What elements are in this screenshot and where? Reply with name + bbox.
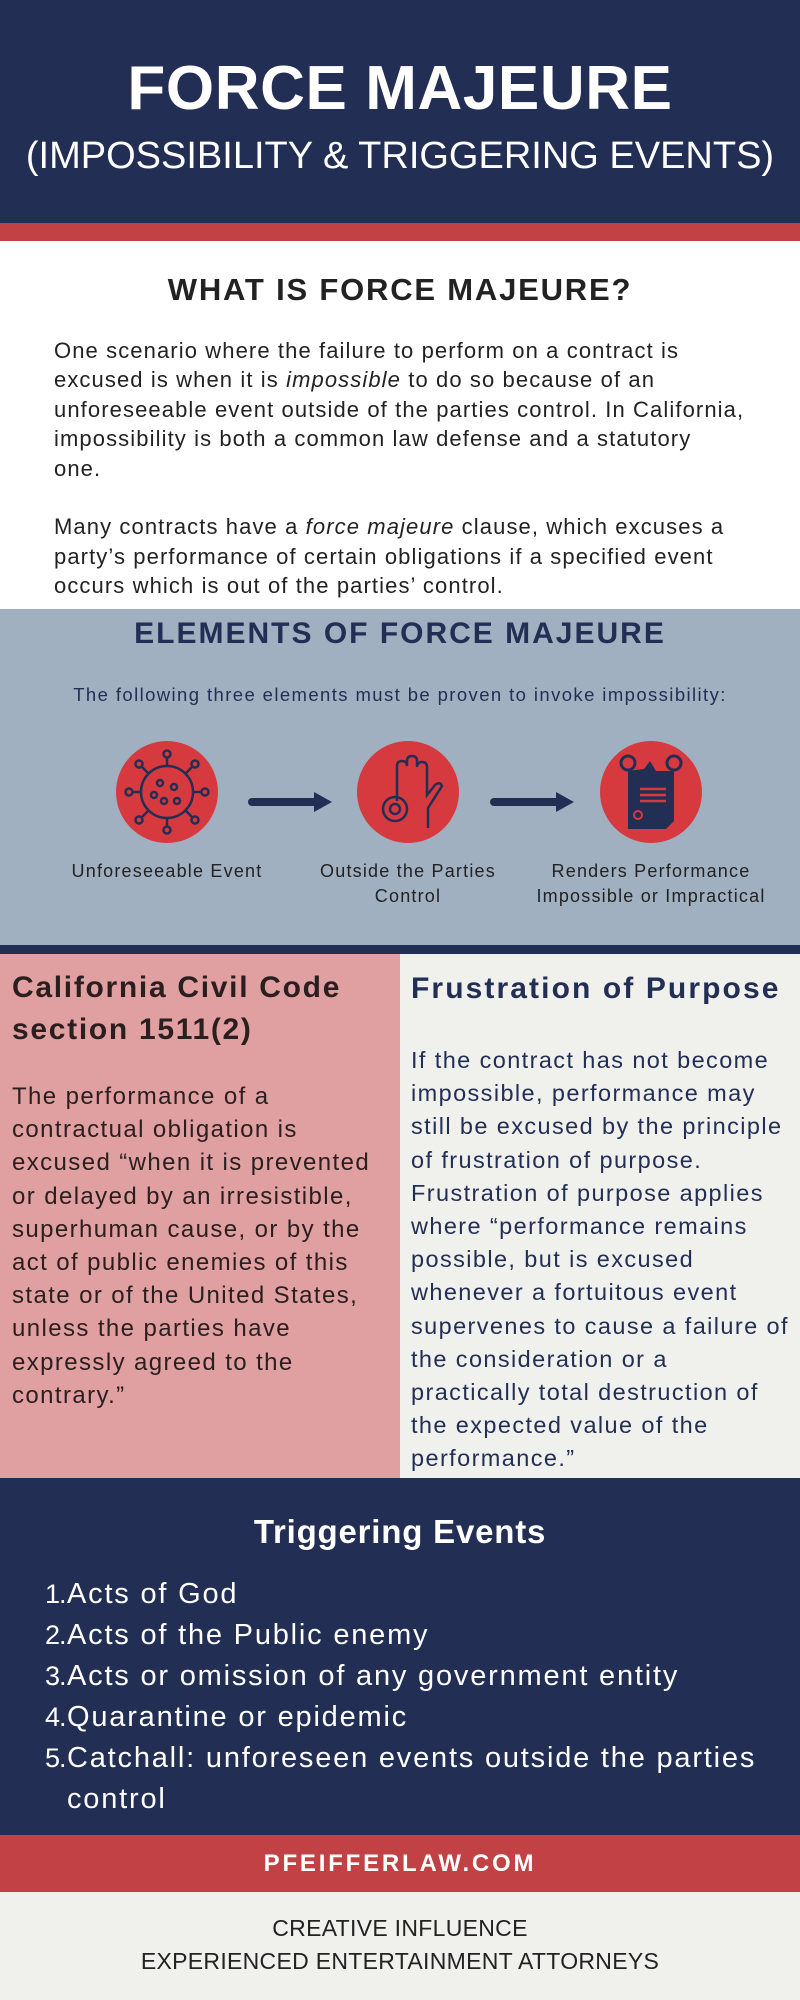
panel: california civil code — [0, 954, 400, 1478]
text: civil code quote: expressly agreed to the — [12, 1349, 294, 1376]
footer: EXPERIENCED ENTERTAINMENT ATTORNEYS — [141, 1948, 659, 1974]
list: triggering events — [45, 1578, 756, 1815]
text block: definition — [54, 338, 744, 598]
label: outside the parties control: Control — [375, 886, 441, 906]
label: unforeseeable event: Unforeseeable Event — [72, 861, 262, 881]
text: civil code quote — [12, 1083, 370, 1409]
heading: frustration: Frustration of Purpose — [411, 972, 781, 1005]
text: civil code quote: contractual obligation is — [12, 1116, 298, 1143]
title: FORCE MAJEURE — [127, 54, 673, 123]
list: triggering events: control — [67, 1783, 167, 1815]
website banner — [0, 1835, 800, 1892]
heading: civil code: section 1511(2) — [12, 1013, 253, 1046]
text block: definition: One scenario where the failure to perform on a contract is — [54, 338, 679, 363]
list: triggering events: Acts of the Public enemy — [67, 1619, 429, 1651]
text: civil code quote: unless the parties have — [12, 1315, 291, 1342]
text: frustration explanation: the expected value of the — [411, 1412, 709, 1438]
text: civil code quote: The performance of a — [12, 1083, 269, 1110]
footer: CREATIVE INFLUENCE — [272, 1915, 528, 1941]
label: renders performance impossible: Renders Performance — [552, 861, 750, 881]
subtitle: (IMPOSSIBILITY & TRIGGERING EVENTS) — [26, 135, 774, 177]
text block: definition: party’s performance of certain obligations if a specified event — [54, 544, 714, 569]
icon: hand and gear — [357, 741, 459, 843]
text: frustration explanation: still be excused by the principle — [411, 1113, 782, 1139]
section heading: what is force majeure: WHAT IS FORCE MAJEURE? — [168, 272, 632, 307]
text: civil code quote: excused “when it is prevented — [12, 1149, 370, 1176]
text: frustration explanation: possible, but is excused — [411, 1246, 694, 1272]
list: triggering events: 4. — [45, 1702, 66, 1732]
list: triggering events: 3. — [45, 1661, 66, 1691]
text: civil code quote: state or of the United States, — [12, 1282, 358, 1309]
text: frustration explanation: of frustration of purpose. — [411, 1147, 702, 1173]
list: triggering events: Acts of God — [67, 1578, 238, 1610]
text block: definition: impossibility is both a common law defense and a statutory — [54, 426, 691, 451]
text: frustration explanation — [411, 1047, 789, 1471]
label: renders performance impossible — [536, 861, 766, 906]
text: frustration explanation: impossible, performance may — [411, 1080, 756, 1106]
heading: civil code: California Civil Code — [12, 971, 341, 1004]
text: frustration explanation: practically total destruction of — [411, 1379, 759, 1405]
text: frustration explanation: the consideration or a — [411, 1346, 668, 1372]
arrow 1 — [248, 792, 332, 812]
text: civil code quote: act of public enemies of this — [12, 1249, 349, 1276]
list: triggering events: Acts or omission of any government entity — [67, 1660, 679, 1692]
panel: frustration of purpose — [400, 954, 800, 1478]
arrow 2 — [490, 792, 574, 812]
text: frustration explanation: Frustration of purpose applies — [411, 1180, 764, 1206]
list: triggering events: 5. — [45, 1743, 66, 1773]
text block: definition: Many contracts have a force majeure clause, which excuses a — [54, 514, 724, 539]
label: outside the parties control — [320, 861, 496, 906]
panel: elements of force majeure — [0, 609, 800, 954]
text: civil code quote: superhuman cause, or by the — [12, 1216, 361, 1243]
heading: elements: ELEMENTS OF FORCE MAJEURE — [134, 617, 666, 650]
text block: definition: one. — [54, 456, 101, 481]
header banner — [0, 0, 800, 223]
icon: torn contract — [600, 741, 702, 843]
list: triggering events: 2. — [45, 1620, 66, 1650]
text block: definition: unforeseeable event outside of the parties control. In California, — [54, 397, 744, 422]
footer — [0, 1892, 800, 2000]
text: frustration explanation: whenever a fortuitous event — [411, 1279, 738, 1305]
text: civil code quote: or delayed by an irresistible, — [12, 1183, 353, 1210]
heading: triggering events: Triggering Events — [254, 1513, 546, 1550]
heading: civil code — [12, 971, 341, 1046]
website banner: PFEIFFERLAW.COM — [264, 1850, 536, 1877]
list: triggering events: Catchall: unforeseen events outside the parties — [67, 1742, 756, 1774]
text: frustration explanation: performance.” — [411, 1445, 575, 1471]
text: frustration explanation: supervenes to cause a failure of — [411, 1313, 789, 1339]
text: civil code quote: contrary.” — [12, 1382, 126, 1409]
label: outside the parties control: Outside the Parties — [320, 861, 496, 881]
text block: definition: occurs which is out of the parties’ control. — [54, 573, 504, 598]
subheading: The following three elements must be proven to invoke impossibility: — [73, 684, 727, 705]
text: frustration explanation: where “performance remains — [411, 1213, 748, 1239]
icon: virus — [116, 741, 218, 843]
panel: triggering events — [0, 1478, 800, 1835]
list: triggering events: Quarantine or epidemic — [67, 1701, 408, 1733]
label: renders performance impossible: Impossible or Impractical — [536, 886, 766, 906]
text: frustration explanation: If the contract has not become — [411, 1047, 769, 1073]
text block: definition: excused is when it is impossible to do so because of an — [54, 367, 655, 392]
list: triggering events: 1. — [45, 1579, 66, 1609]
